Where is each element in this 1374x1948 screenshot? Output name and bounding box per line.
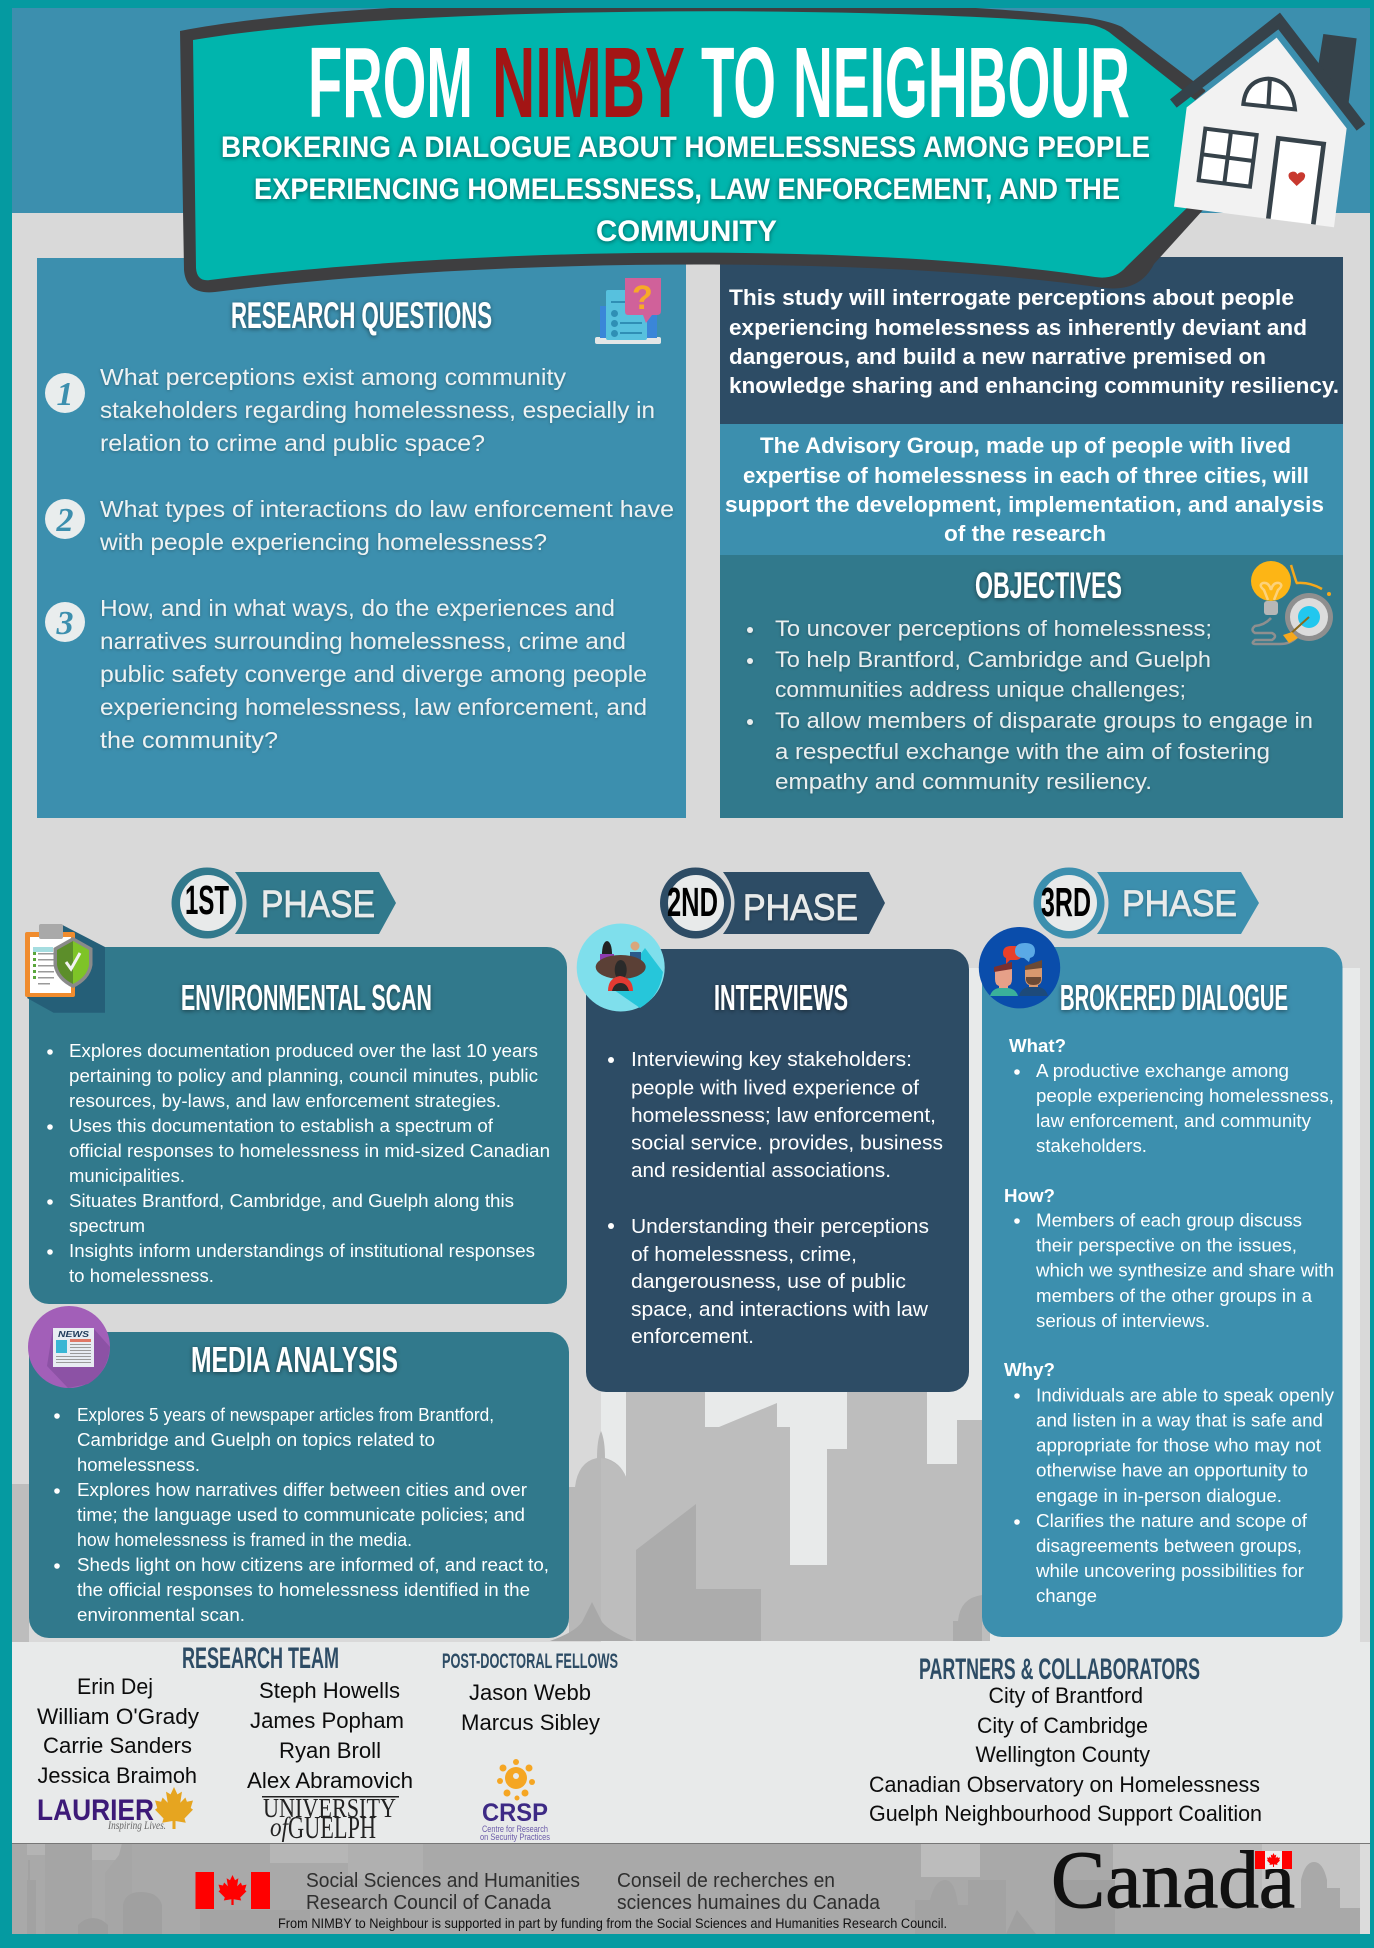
panel: study statement: knowledge sharing and enhancing community resiliency. [729, 373, 1339, 398]
names column 2: Alex Abramovich [247, 1768, 413, 1793]
interviews list: of homelessness, crime, [631, 1243, 857, 1266]
panel: advisory group: expertise of homelessness in each of three cities, will [743, 463, 1309, 488]
heading: environmental scan: ENVIRONMENTAL SCAN [181, 977, 432, 1018]
names column 2: Steph Howells [259, 1678, 400, 1703]
why section: Individuals are able to speak openly [1036, 1384, 1335, 1406]
logo: laurier [37, 1787, 193, 1832]
logo: university of guelph [262, 1793, 399, 1845]
heading: media analysis: MEDIA ANALYSIS [191, 1339, 398, 1380]
number 3: 3 [56, 605, 74, 642]
number 2: 2 [56, 502, 74, 539]
how section: which we synthesize and share with [1035, 1260, 1334, 1280]
interviews list: enforcement. [631, 1325, 754, 1348]
logo: crsp: CRSP [482, 1799, 548, 1827]
environmental scan list: spectrum [69, 1215, 145, 1236]
partners list: City of Cambridge [977, 1713, 1148, 1738]
partners list: Wellington County [976, 1742, 1151, 1767]
logo: laurier: Inspiring Lives. [107, 1818, 166, 1832]
number 1: 1 [56, 376, 74, 413]
sshrc french name: Conseil de recherches en [617, 1870, 835, 1892]
environmental scan list: Explores documentation produced over the last 10 years [69, 1040, 538, 1061]
title [308, 27, 1130, 139]
title: FROM [308, 27, 473, 139]
names column 3: Marcus Sibley [461, 1710, 601, 1735]
how section: How? [1004, 1185, 1055, 1206]
objectives list: empathy and community resiliency. [775, 769, 1152, 794]
icon: canada flag [196, 1872, 270, 1909]
media analysis list: Sheds light on how citizens are informed of, and react to, [77, 1554, 549, 1575]
question 1: stakeholders regarding homelessness, especially in [100, 397, 655, 423]
names column 2 [247, 1678, 413, 1793]
names column 1: Carrie Sanders [43, 1733, 192, 1758]
question 1 [100, 364, 655, 456]
media analysis list: Cambridge and Guelph on topics related to [77, 1429, 435, 1450]
why section: appropriate for those who may not [1036, 1434, 1322, 1456]
question 1: What perceptions exist among community [100, 364, 567, 390]
panel: study statement: This study will interrogate perceptions about people [729, 285, 1294, 310]
why section: Why? [1004, 1359, 1055, 1380]
interviews list: social service. provides, business [631, 1132, 943, 1154]
question 3: experiencing homelessness, law enforcement, and [100, 694, 647, 720]
how section [1004, 1185, 1334, 1331]
media analysis list: the official responses to homelessness identified in the [77, 1579, 530, 1600]
environmental scan list: Insights inform understandings of institutional responses [69, 1240, 535, 1261]
objectives list: To uncover perceptions of homelessness; [775, 616, 1212, 641]
panel: credits section [12, 1642, 1370, 1845]
panel: brokered dialogue [979, 927, 1342, 1637]
sshrc english name [306, 1870, 580, 1914]
names column 1: William O'Grady [37, 1704, 200, 1729]
phase badge: 1st: PHASE [261, 884, 375, 926]
icon: newspaper: NEWS [58, 1329, 89, 1339]
environmental scan list: municipalities. [69, 1165, 185, 1186]
media analysis list: time; the language used to communicate policies; and [77, 1504, 525, 1525]
top blue band [12, 8, 1370, 213]
skyline backdrop [12, 968, 1360, 1642]
names column 2: James Popham [250, 1708, 404, 1733]
canada wordmark: Canada [1051, 1834, 1295, 1925]
question 1: relation to crime and public space? [100, 430, 485, 456]
what section: law enforcement, and community [1036, 1110, 1312, 1131]
environmental scan list: to homelessness. [69, 1265, 214, 1286]
interviews list [608, 1048, 943, 1348]
question 2: What types of interactions do law enforcement have [100, 496, 674, 522]
why section: disagreements between groups, [1036, 1535, 1302, 1556]
subtitle: COMMUNITY [596, 215, 777, 248]
phase badge: 1st [172, 868, 396, 938]
footer top line [12, 1843, 1370, 1844]
what section: people experiencing homelessness, [1036, 1085, 1334, 1106]
heading: post-doctoral fellows: POST-DOCTORAL FELLOWS [442, 1650, 618, 1673]
names column 1: Jessica Braimoh [38, 1763, 197, 1788]
partners list: Canadian Observatory on Homelessness [869, 1772, 1260, 1797]
media analysis list: environmental scan. [77, 1604, 245, 1625]
heading: interviews: INTERVIEWS [714, 977, 848, 1018]
icon: bulb and target [1251, 561, 1333, 644]
icon: two people talking [979, 927, 1060, 1008]
panel: advisory group: of the research [944, 521, 1106, 546]
question 2 [99, 496, 674, 555]
what section: A productive exchange among [1036, 1060, 1289, 1081]
icon: interview table [577, 924, 665, 1012]
heading: research team: RESEARCH TEAM [182, 1642, 339, 1675]
objectives list: a respectful exchange with the aim of fostering [775, 739, 1270, 764]
what section: stakeholders. [1036, 1135, 1147, 1156]
environmental scan list: Situates Brantford, Cambridge, and Guelph along this [69, 1190, 514, 1211]
number 1 [45, 373, 85, 413]
question 3: narratives surrounding homelessness, crime and [100, 628, 626, 654]
panel: media analysis [28, 1306, 569, 1638]
panel: research questions [37, 258, 686, 818]
sshrc english name: Social Sciences and Humanities [306, 1870, 580, 1892]
environmental scan list: official responses to homelessness in mid-sized Canadian [69, 1140, 550, 1161]
interviews list: Interviewing key stakeholders: [631, 1048, 912, 1071]
title banner shape [180, 0, 1225, 292]
names column 2: Ryan Broll [279, 1738, 381, 1763]
panel: study statement: dangerous, and build a new narrative premised on [729, 344, 1266, 369]
partners list: Guelph Neighbourhood Support Coalition [869, 1801, 1262, 1826]
logo: laurier: LAURIER [37, 1794, 154, 1827]
phase badge: 3rd: PHASE [1122, 883, 1237, 924]
environmental scan list: Uses this documentation to establish a spectrum of [69, 1115, 494, 1136]
subtitle: EXPERIENCING HOMELESSNESS, LAW ENFORCEMENT, AND THE [254, 173, 1120, 206]
phase badge: 2nd [660, 868, 885, 938]
media analysis list: homelessness. [77, 1454, 200, 1475]
question 3: the community? [100, 727, 278, 753]
icon: question document: ? [632, 279, 653, 317]
how section: members of the other groups in a [1036, 1285, 1313, 1306]
logo: crsp: Centre for Research [482, 1824, 548, 1835]
phase badge: 2nd: PHASE [743, 887, 858, 928]
names column 3: Jason Webb [469, 1680, 591, 1705]
logo: crsp: on Security Practices [480, 1832, 550, 1843]
environmental scan list: resources, by-laws, and law enforcement strategies. [69, 1090, 501, 1111]
partners list: City of Brantford [988, 1683, 1143, 1708]
why section: while uncovering possibilities for [1035, 1560, 1304, 1581]
question 3: How, and in what ways, do the experiences and [100, 595, 615, 621]
icon: clipboard and shield [25, 924, 105, 1013]
logo: crsp [480, 1759, 550, 1843]
environmental scan list [47, 1040, 550, 1286]
icon: house [1170, 13, 1365, 227]
heading: research questions: RESEARCH QUESTIONS [231, 295, 492, 336]
panel: interviews [577, 924, 969, 1392]
interviews list: people with lived experience of [631, 1076, 919, 1100]
why section: Clarifies the nature and scope of [1036, 1510, 1308, 1531]
interviews list: dangerousness, use of public [631, 1270, 906, 1293]
panel: study statement: experiencing homelessness as inherently deviant and [729, 315, 1307, 340]
question 3 [100, 595, 647, 753]
what section [1009, 1035, 1334, 1156]
interviews list: and residential associations. [631, 1159, 891, 1182]
objectives list: To allow members of disparate groups to engage in [775, 708, 1313, 733]
names column 1 [37, 1674, 200, 1788]
phase badge: 1st: 1ST [185, 877, 229, 923]
icon: newspaper [28, 1306, 110, 1388]
number 3 [45, 602, 85, 642]
objectives list [747, 616, 1313, 794]
media analysis list: Explores 5 years of newspaper articles from Brantford, [77, 1404, 494, 1425]
why section [1004, 1359, 1335, 1606]
phase badge: 2nd: 2ND [667, 879, 718, 925]
logo: university of guelph: UNIVERSITY [263, 1793, 396, 1823]
interviews list: homelessness; law enforcement, [631, 1104, 936, 1127]
media analysis list: Explores how narratives differ between cities and over [77, 1479, 527, 1500]
sshrc french name: sciences humaines du Canada [617, 1892, 881, 1914]
top border strip [0, 0, 1374, 8]
panel: study statement [720, 257, 1343, 424]
panel: environmental scan [25, 924, 567, 1304]
phase badge: 3rd [1034, 868, 1259, 938]
panel: advisory group [720, 424, 1343, 555]
how section: serious of interviews. [1036, 1310, 1210, 1331]
media analysis list [54, 1404, 549, 1625]
subtitle: BROKERING A DIALOGUE ABOUT HOMELESSNESS AMONG PEOPLE [221, 131, 1150, 164]
names column 3 [461, 1680, 601, 1735]
how section: Members of each group discuss [1036, 1210, 1302, 1230]
why section: otherwise have an opportunity to [1036, 1460, 1308, 1480]
environmental scan list: pertaining to policy and planning, council minutes, public [69, 1065, 538, 1086]
what section: What? [1009, 1035, 1066, 1056]
number 2 [45, 499, 85, 539]
why section: engage in in-person dialogue. [1036, 1485, 1282, 1506]
objectives list: communities address unique challenges; [775, 677, 1186, 702]
panel: objectives [720, 555, 1343, 818]
interviews list: Understanding their perceptions [631, 1215, 929, 1238]
how section: their perspective on the issues, [1036, 1234, 1297, 1256]
logo: university of guelph: of [270, 1812, 291, 1842]
subtitle [221, 131, 1150, 248]
why section: change [1036, 1585, 1097, 1606]
title: TO [701, 27, 776, 139]
why section: and listen in a way that is safe and [1036, 1410, 1323, 1430]
sshrc french name [617, 1870, 881, 1914]
logo: university of guelph: GUELPH [288, 1809, 376, 1845]
phase badge: 3rd: 3RD [1041, 879, 1091, 925]
funding note: From NIMBY to Neighbour is supported in part by funding from the Social Sciences and Humanities Research Council. [278, 1916, 947, 1931]
question 2: with people experiencing homelessness? [99, 529, 547, 555]
objectives list: To help Brantford, Cambridge and Guelph [775, 647, 1211, 672]
interviews list: space, and interactions with law [631, 1298, 928, 1321]
footer skyline [12, 1843, 1370, 1934]
question 3: public safety converge and diverge among people [100, 661, 647, 687]
partners list [869, 1683, 1262, 1826]
media analysis list: how homelessness is framed in the media. [77, 1529, 412, 1550]
names column 1: Erin Dej [77, 1674, 153, 1699]
title: NIMBY [492, 27, 685, 139]
icon: question document [595, 278, 661, 344]
sshrc english name: Research Council of Canada [306, 1892, 552, 1914]
panel: advisory group: The Advisory Group, made up of people with lived [760, 433, 1291, 458]
heading: objectives: OBJECTIVES [975, 565, 1122, 606]
panel: advisory group: support the development, implementation, and analysis [725, 492, 1324, 517]
